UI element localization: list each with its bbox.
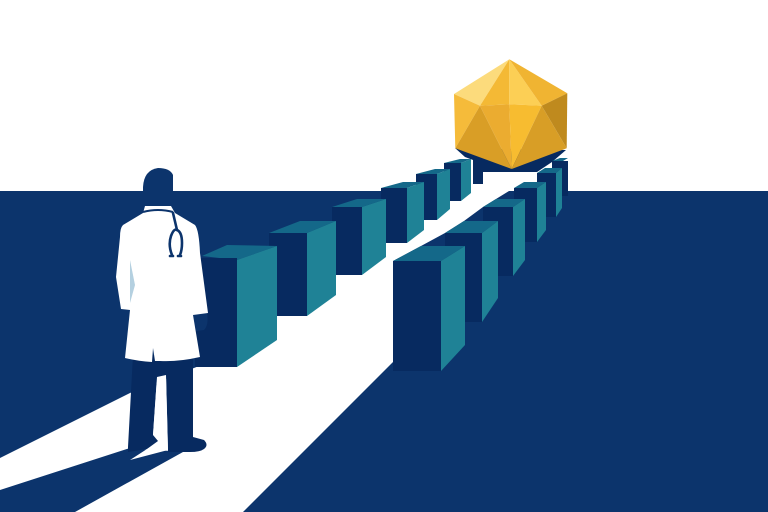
- white gap between legs: [130, 375, 168, 460]
- coat inner arm shading: [130, 260, 135, 303]
- legs and shoes: [128, 355, 206, 452]
- box left 2: [269, 221, 336, 316]
- box left 3: [332, 199, 386, 275]
- box right 1: [393, 246, 465, 371]
- box right 2: [445, 221, 498, 322]
- box right 6: [552, 158, 568, 196]
- box left 5: [416, 169, 450, 220]
- box right 3: [483, 199, 525, 276]
- box left 6: [444, 159, 471, 201]
- box left 1: [195, 245, 277, 367]
- coat collar line: [143, 210, 173, 212]
- box right 4: [514, 182, 546, 242]
- icon: stethoscope: [170, 213, 182, 256]
- hand below sleeve: [193, 313, 208, 331]
- box left 4: [381, 182, 424, 243]
- lab coat: [116, 206, 208, 362]
- doctor figure: [116, 168, 208, 460]
- left row of boxes: [195, 159, 471, 367]
- navy base under crystal: [455, 148, 566, 184]
- white light path: [0, 172, 537, 512]
- box right 5: [537, 168, 562, 217]
- right row of boxes: [393, 158, 568, 371]
- icon: golden crystal: [454, 59, 567, 169]
- head and neck: [143, 168, 173, 208]
- doctor's cast shadow: [0, 448, 183, 512]
- navy ground: [0, 191, 768, 512]
